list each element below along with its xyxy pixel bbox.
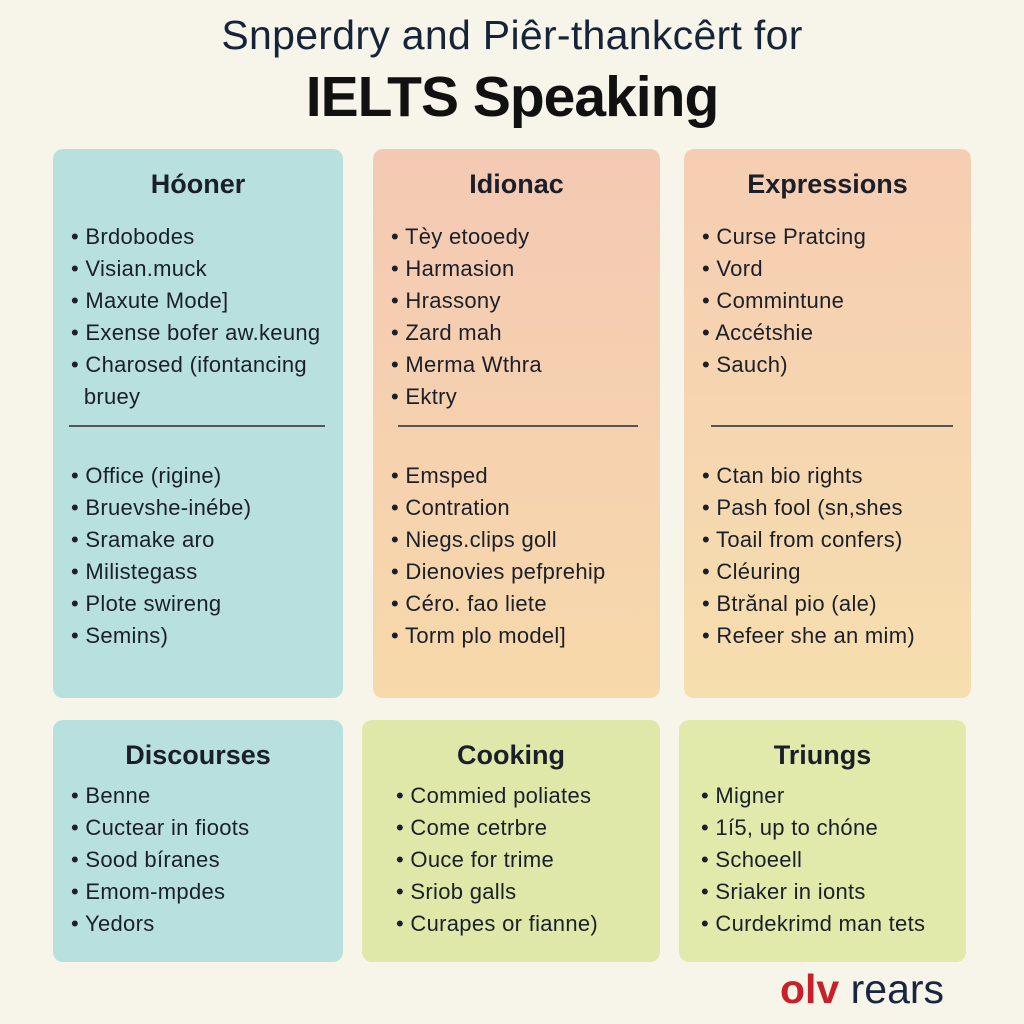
title line 2: IELTS Speaking [306,65,718,129]
panel: Idionac [373,149,660,698]
panel: Cooking: Sriob galls [410,879,516,904]
panel: Expressions: Toail from confers) [716,527,903,552]
panel: Expressions: Curse Pratcing [716,224,866,249]
panel: Idionac: Idionac [469,169,564,199]
panel: Hooner: Milistegass [85,559,198,584]
title line 1: Snperdry and Piêr-thankcêrt for [221,12,803,58]
panel: Hooner: Bruevshe-inébe) [85,495,251,520]
panel: Idionac: Torm plo model] [405,623,566,648]
panel: Discourses: Sood bíranes [85,847,220,872]
panel: Discourses: Benne [85,783,151,808]
panel: Expressions: Expressions [747,169,908,199]
panel: Triungs: 1í5, up to chóne [715,815,878,840]
panel: Hooner: Charosed (ifontancing [85,352,307,377]
panel: Hooner: Sramake aro [85,527,215,552]
panel: Idionac: Ektry [405,384,457,409]
panel: Expressions [684,149,971,698]
panel: Expressions: Cléuring [716,559,801,584]
panel: Expressions: Btrănal pio (ale) [716,591,877,616]
panel: Idionac: Tèy etooedy [405,224,529,249]
logo: olv rears [780,966,944,1012]
panel: Idionac: Merma Wthra [405,352,542,377]
panel: Discourses [53,720,343,962]
panel: Hooner [53,149,343,698]
panel: Triungs [679,720,966,962]
panel: Expressions: Sauch) [716,352,788,377]
panel: Triungs: Sriaker in ionts [715,879,866,904]
panel: Triungs: Curdekrimd man tets [715,911,925,936]
panel: Hooner: Plote swireng [85,591,221,616]
panel: Cooking: Come cetrbre [410,815,547,840]
panel: Hooner: Semins) [85,623,168,648]
panel: Cooking [362,720,660,962]
panel: Idionac: Dienovies pefprehip [405,559,606,584]
panel: Idionac: Hrassony [405,288,501,313]
panel: Idionac: Zard mah [405,320,502,345]
panel: Hooner: Office (rigine) [85,463,222,488]
panel: Cooking: Curapes or fianne) [410,911,598,936]
panel: Expressions: Accétshie [715,320,813,345]
panel: Idionac: Emsped [405,463,488,488]
panel: Discourses: Cuctear in fioots [85,815,250,840]
panel: Idionac: Contration [405,495,510,520]
panel: Expressions: Commintune [716,288,844,313]
panel: Expressions: Pash fool (sn,shes [716,495,903,520]
panel: Hooner: Brdobodes [85,224,195,249]
panel: Triungs: Migner [715,783,784,808]
panel: Expressions: Ctan bio rights [716,463,863,488]
panel: Cooking: Cooking [457,740,565,770]
panel: Discourses: Discourses [125,740,271,770]
panel: Hooner: bruey [84,384,140,409]
panel: Triungs: Schoeell [715,847,802,872]
panel: Hooner: Visian.muck [85,256,207,281]
panel: Expressions: Vord [716,256,763,281]
panel: Hooner: Exense bofer aw.keung [85,320,320,345]
panel: Idionac: Harmasion [405,256,514,281]
panel: Cooking: Ouce for trime [410,847,554,872]
panel: Triungs: Triungs [774,740,871,770]
panel: Discourses: Yedors [85,911,155,936]
panel: Idionac: Céro. fao liete [405,591,547,616]
panel: Cooking: Commied poliates [410,783,591,808]
panel: Idionac: Niegs.clips goll [405,527,557,552]
panel: Discourses: Emom-mpdes [85,879,225,904]
panel: Expressions: Refeer she an mim) [716,623,915,648]
panel: Hooner: Maxute Mode] [85,288,228,313]
panel: Hooner: Hóoner [151,169,245,199]
